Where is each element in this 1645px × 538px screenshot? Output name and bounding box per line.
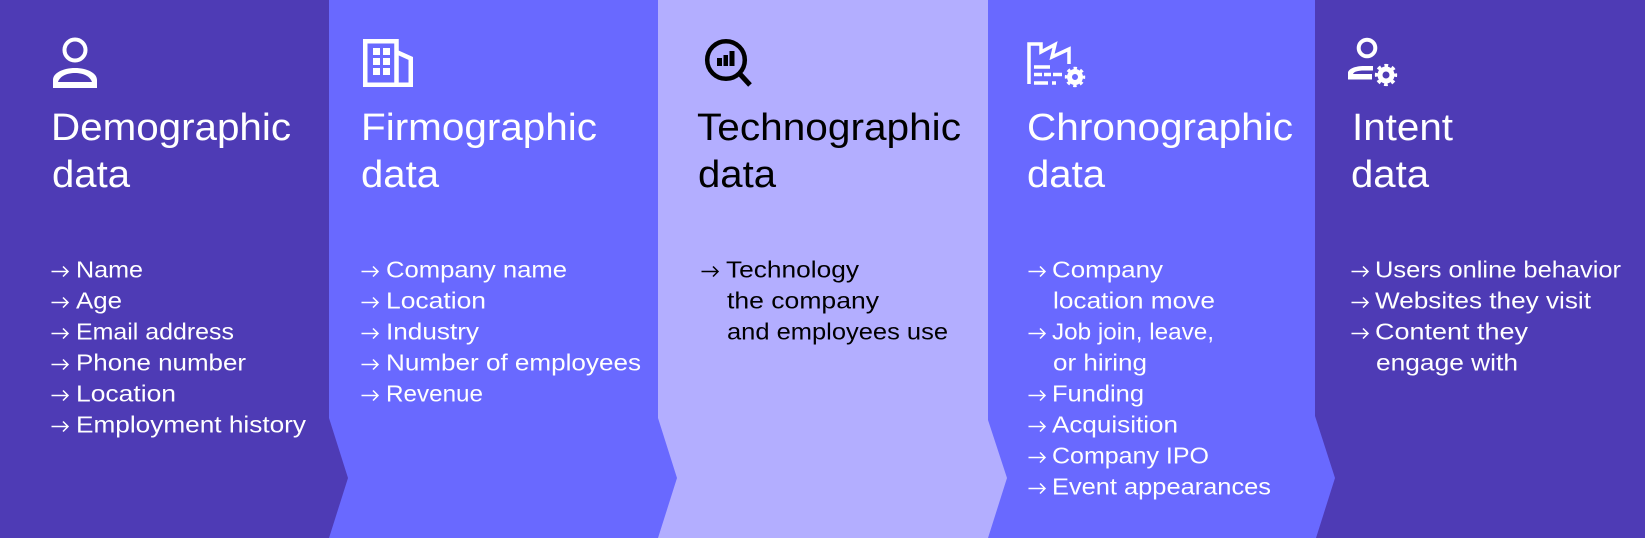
list: demographic data: Email address bbox=[76, 318, 234, 344]
list: chronographic data: Company IPO bbox=[1052, 442, 1209, 468]
list: firmographic data: Number of employees bbox=[386, 350, 641, 376]
list: chronographic data: Event appearances bbox=[1052, 474, 1271, 500]
heading: chronographic data: Chronographic bbox=[1027, 107, 1293, 149]
icon: factory with gear bbox=[1029, 44, 1084, 86]
panel: chronographic data bbox=[980, 0, 1335, 538]
list: demographic data: Phone number bbox=[76, 350, 246, 376]
panel: intent data bbox=[1300, 0, 1645, 538]
list: firmographic data: Industry bbox=[386, 318, 479, 344]
list: technographic data bbox=[702, 256, 948, 344]
heading: intent data bbox=[1351, 107, 1453, 196]
heading: firmographic data bbox=[361, 107, 597, 196]
heading: demographic data: Demographic bbox=[51, 107, 291, 149]
heading: firmographic data: data bbox=[361, 154, 440, 196]
icon: person bbox=[53, 40, 97, 88]
list: chronographic data: Funding bbox=[1052, 380, 1144, 406]
icon: office building bbox=[365, 41, 411, 85]
heading: firmographic data: Firmographic bbox=[361, 107, 597, 149]
list: demographic data: Location bbox=[76, 380, 176, 406]
list: technographic data: the company bbox=[727, 288, 879, 314]
heading: technographic data: Technographic bbox=[697, 107, 961, 149]
list: chronographic data bbox=[1028, 256, 1271, 500]
list: demographic data: Age bbox=[76, 288, 122, 314]
list: firmographic data bbox=[362, 256, 641, 406]
list: intent data: Websites they visit bbox=[1375, 288, 1592, 314]
heading: chronographic data: data bbox=[1027, 154, 1106, 196]
heading: technographic data bbox=[697, 107, 961, 196]
list: firmographic data: Location bbox=[386, 288, 486, 314]
panel: demographic data bbox=[0, 0, 348, 538]
list: intent data: Content they bbox=[1375, 318, 1528, 344]
list: firmographic data: Company name bbox=[386, 256, 567, 282]
list: technographic data: Technology bbox=[726, 256, 859, 282]
heading: demographic data: data bbox=[52, 154, 131, 196]
heading: chronographic data bbox=[1027, 107, 1293, 196]
list: chronographic data: Acquisition bbox=[1052, 412, 1178, 438]
icon: person with gear bbox=[1348, 40, 1396, 84]
list: chronographic data: location move bbox=[1053, 288, 1215, 314]
list: intent data bbox=[1352, 256, 1621, 376]
panel: technographic data bbox=[650, 0, 1007, 538]
list: chronographic data: Company bbox=[1052, 256, 1163, 282]
list: demographic data: Employment history bbox=[76, 412, 306, 438]
list: demographic data: Name bbox=[76, 256, 143, 282]
heading: technographic data: data bbox=[698, 154, 777, 196]
panel: firmographic data bbox=[320, 0, 677, 538]
list: demographic data bbox=[52, 256, 306, 438]
heading: demographic data bbox=[51, 107, 291, 196]
list: firmographic data: Revenue bbox=[386, 380, 483, 406]
list: intent data: engage with bbox=[1376, 350, 1518, 376]
list: technographic data: and employees use bbox=[727, 318, 948, 344]
list: intent data: Users online behavior bbox=[1375, 256, 1621, 282]
list: chronographic data: or hiring bbox=[1053, 350, 1147, 376]
heading: intent data: Intent bbox=[1352, 107, 1453, 149]
icon: magnifier with bars bbox=[707, 41, 750, 85]
list: chronographic data: Job join, leave, bbox=[1052, 318, 1214, 344]
heading: intent data: data bbox=[1351, 154, 1430, 196]
